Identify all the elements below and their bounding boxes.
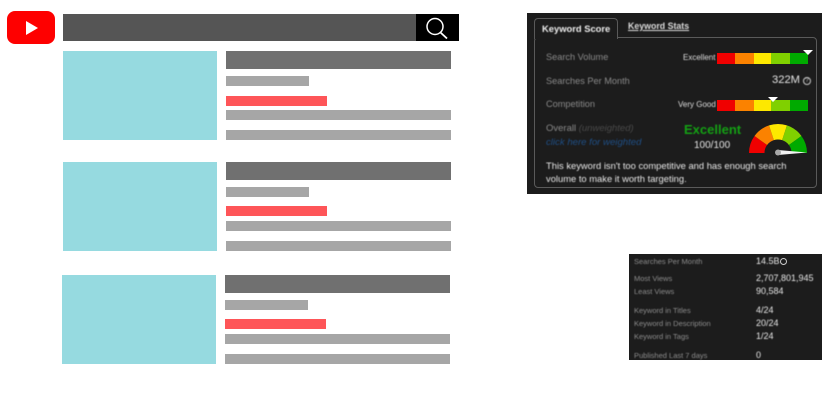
stat: keyword in titles: Keyword in Titles bbox=[634, 306, 691, 315]
description text: volume to make it worth targeting. bbox=[546, 172, 687, 184]
description text: This keyword isn't too competitive and has enough search bbox=[546, 160, 786, 171]
stat: most views bbox=[634, 273, 814, 283]
highlighted red bar bbox=[226, 96, 327, 106]
stat: least views bbox=[634, 286, 784, 296]
label: Searches Per Month: Searches Per Month bbox=[546, 76, 630, 86]
description line bbox=[226, 241, 451, 251]
stat: keyword in tags: 1/24 bbox=[756, 331, 774, 341]
channel bar bbox=[225, 300, 308, 310]
stat: least views: Least Views bbox=[634, 287, 674, 296]
meter: competition bbox=[717, 100, 808, 111]
stat: keyword in description: 20/24 bbox=[756, 318, 779, 328]
label: Search Volume: Search Volume bbox=[546, 52, 608, 62]
title bar bbox=[226, 51, 451, 69]
stat: keyword in tags bbox=[634, 331, 774, 341]
marker: competition bbox=[768, 97, 778, 102]
highlighted red bar bbox=[226, 206, 327, 216]
score label: Excellent: Excellent bbox=[684, 122, 741, 137]
score: 100/100: 100/100 bbox=[694, 140, 730, 151]
video result 3 bbox=[62, 275, 450, 364]
video result 1 bbox=[63, 51, 451, 140]
stat: published last 7 days: Published Last 7 days bbox=[634, 351, 707, 360]
thumbnail bbox=[63, 162, 217, 251]
label: Competition: Competition bbox=[546, 99, 595, 109]
description line bbox=[225, 354, 450, 364]
stat: keyword in description: Keyword in Description bbox=[634, 319, 711, 328]
icon: help: ? bbox=[805, 78, 809, 84]
thumbnail bbox=[63, 51, 217, 140]
stat: most views: 2,707,801,945 bbox=[756, 273, 814, 283]
stat: keyword in titles bbox=[634, 305, 774, 315]
inner border bbox=[534, 37, 817, 188]
tab: Keyword Stats: Keyword Stats bbox=[628, 21, 689, 31]
icon: help bbox=[803, 77, 811, 85]
stat: published last 7 days bbox=[634, 350, 762, 360]
description line bbox=[226, 221, 451, 231]
description line bbox=[226, 130, 451, 140]
panel: keyword score bbox=[527, 13, 822, 194]
meter: search volume bbox=[717, 53, 808, 64]
label: Overall: Overall (unweighted) bbox=[546, 123, 634, 134]
chart: score gauge bbox=[749, 124, 807, 156]
video result 2 bbox=[63, 162, 451, 251]
tab: Keyword Score bbox=[534, 18, 618, 39]
icon: YouTube logo bbox=[7, 11, 55, 44]
icon: search magnifier bbox=[416, 14, 459, 41]
channel bar bbox=[226, 187, 309, 197]
link: click here for weighted: click here for weighted bbox=[546, 137, 641, 148]
description line bbox=[226, 110, 451, 120]
stat: most views: Most Views bbox=[634, 274, 672, 283]
title bar bbox=[225, 275, 450, 293]
panel: keyword stats bbox=[629, 254, 822, 360]
thumbnail bbox=[62, 275, 216, 364]
rating: Excellent: Excellent bbox=[683, 53, 715, 62]
stat: searches per month bbox=[634, 256, 787, 266]
stat: least views: 90,584 bbox=[756, 286, 784, 296]
rating: Very Good: Very Good bbox=[678, 100, 716, 109]
stat: keyword in tags: Keyword in Tags bbox=[634, 332, 689, 341]
stat: keyword in description bbox=[634, 318, 779, 328]
channel bar bbox=[226, 76, 309, 86]
stat: searches per month: Searches Per Month bbox=[634, 257, 702, 266]
stat: searches per month: 14.5B bbox=[756, 256, 780, 266]
stat: published last 7 days: 0 bbox=[756, 350, 761, 360]
search bar bbox=[63, 14, 459, 41]
value: 322M: 322M bbox=[772, 74, 800, 86]
tab label: Keyword Score bbox=[542, 23, 610, 34]
title bar bbox=[226, 162, 451, 180]
stat: keyword in titles: 4/24 bbox=[756, 305, 774, 315]
description line bbox=[225, 334, 450, 344]
description text bbox=[546, 160, 787, 185]
highlighted red bar bbox=[225, 319, 326, 329]
marker: search volume bbox=[803, 50, 813, 55]
